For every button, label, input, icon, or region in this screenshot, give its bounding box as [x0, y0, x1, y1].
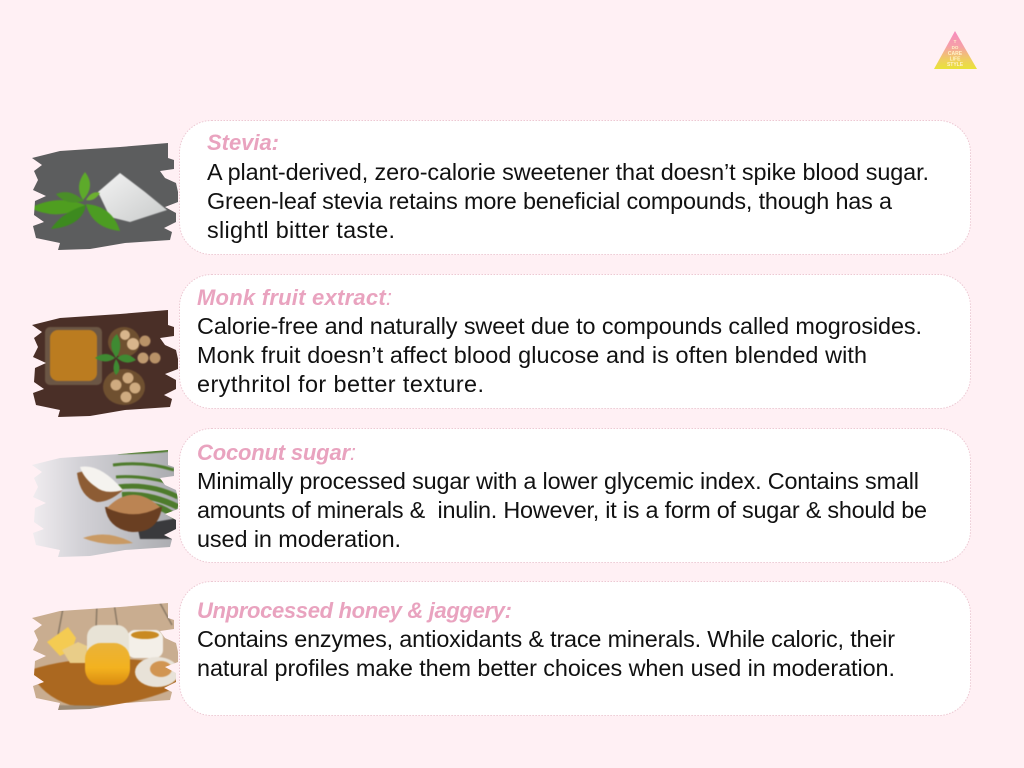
text: coconut sugar description: used in moderation. [197, 526, 401, 552]
logo: triangle badge: LIFE [950, 56, 961, 62]
text: coconut sugar description: Minimally processed sugar with a lower glycemic index. Contains small [197, 468, 919, 494]
logo: triangle badge: T [954, 39, 957, 44]
image: stevia leaves and powder [28, 140, 180, 252]
panel: coconut sugar [180, 428, 970, 562]
text: coconut sugar description: amounts of minerals & inulin. However, it is a form of sugar & should be [197, 497, 927, 523]
text: monk fruit description [197, 313, 922, 397]
text: stevia description: Green-leaf stevia retains more beneficial compounds, though has a [207, 188, 893, 214]
image: honey and honeycomb [28, 600, 180, 712]
text: monk fruit description: Monk fruit doesn’t affect blood glucose and is often blended with [197, 342, 867, 368]
text: monk fruit description: erythritol for better texture. [197, 371, 484, 397]
panel: unprocessed honey and jaggery [180, 582, 970, 716]
heading: unprocessed honey and jaggery: Unprocessed honey & jaggery: [197, 598, 512, 623]
logo: triangle badge [934, 31, 977, 69]
text: monk fruit description: Calorie-free and naturally sweet due to compounds called mogrosides. [197, 313, 922, 339]
image: coconut sugar [28, 447, 180, 559]
logo: triangle badge: STYLE [947, 62, 964, 68]
logo: triangle badge: DO [952, 45, 959, 50]
text: honey and jaggery description [197, 626, 895, 681]
heading: monk fruit extract: Monk fruit extract: [197, 285, 392, 310]
text: honey and jaggery description: natural profiles make them better choices when used in moderation. [197, 655, 895, 681]
text: coconut sugar description [197, 468, 927, 552]
heading: stevia: Stevia: [207, 130, 279, 155]
text: honey and jaggery description: Contains enzymes, antioxidants & trace minerals. While caloric, their [197, 626, 895, 652]
text: stevia description: slightl bitter taste. [207, 217, 395, 243]
panel: monk fruit extract [180, 274, 970, 408]
text: stevia description: A plant-derived, zero-calorie sweetener that doesn’t spike blood sugar. [207, 159, 929, 185]
text: stevia description [207, 159, 929, 243]
heading: coconut sugar: Coconut sugar: [197, 440, 356, 465]
panel: stevia [180, 120, 970, 254]
logo: triangle badge: CARE [948, 51, 963, 57]
image: monk fruit and brown sugar [28, 307, 180, 419]
